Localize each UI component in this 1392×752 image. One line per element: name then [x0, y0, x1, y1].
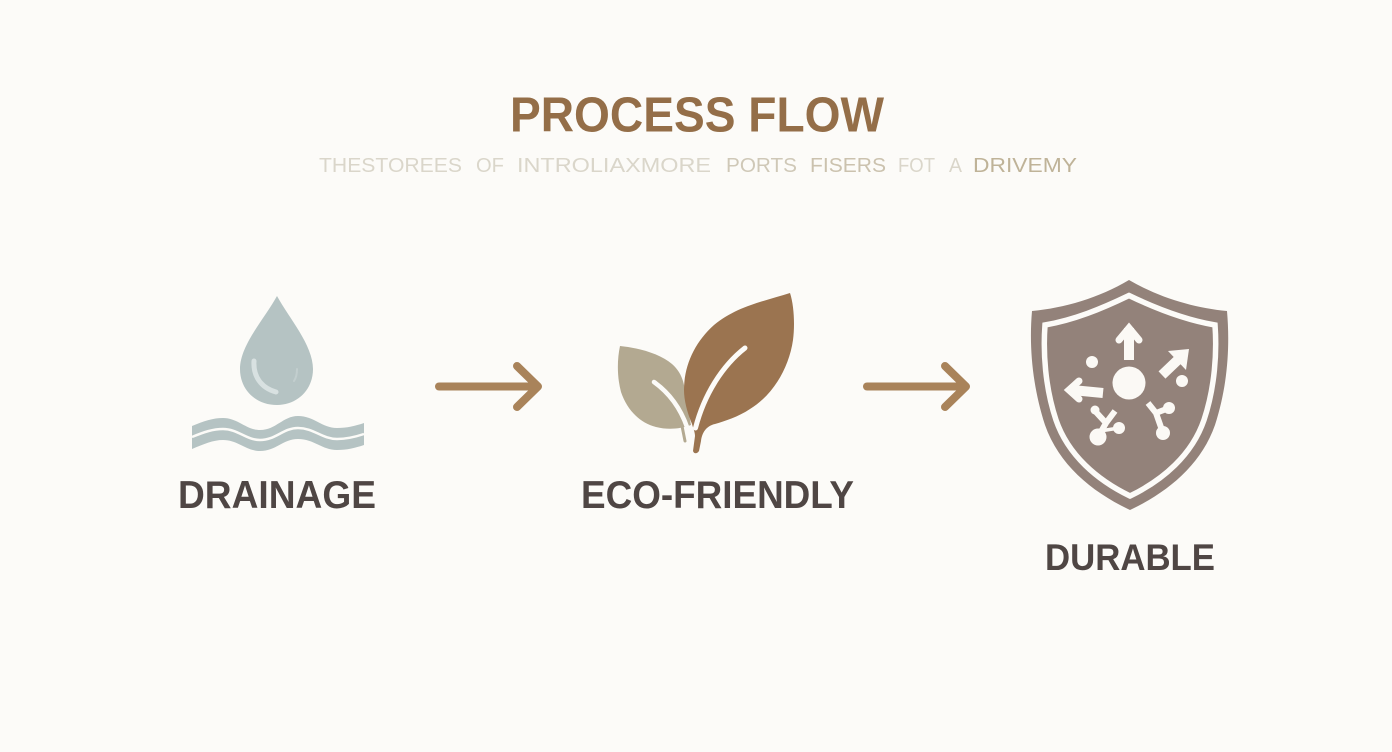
subtitle: THESTOREES	[319, 154, 462, 177]
icon: right molecule	[1148, 402, 1175, 440]
step: drainage	[178, 296, 376, 517]
icon: water waves	[192, 416, 364, 451]
subtitle: FISERS	[810, 154, 886, 177]
icon: shield	[1031, 280, 1228, 510]
icon: water drop	[240, 296, 313, 405]
label: eco-friendly: ECO-FRIENDLY	[581, 474, 854, 517]
subtitle: DRIVEMY	[973, 154, 1077, 177]
icon: left molecule	[1090, 406, 1125, 446]
title: PROCESS FLOW	[510, 88, 885, 142]
subtitle: FOT	[898, 154, 935, 177]
label: drainage: DRAINAGE	[178, 474, 376, 517]
subtitle: OF	[476, 154, 504, 177]
icon: leaves	[618, 293, 794, 453]
subtitle: INTROLIAXMORE	[517, 154, 711, 177]
label: durable: DURABLE	[1045, 537, 1215, 578]
arrow: drainage to eco-friendly	[439, 366, 538, 407]
subtitle: A	[949, 154, 962, 177]
icon: outward arrows	[1069, 328, 1189, 399]
icon: center particles	[1086, 356, 1188, 400]
subtitle: PORTS	[726, 154, 797, 177]
subtitle	[319, 154, 1077, 177]
step: durable	[1031, 280, 1228, 578]
arrow: eco-friendly to durable	[867, 366, 966, 407]
step: eco-friendly	[581, 293, 854, 517]
